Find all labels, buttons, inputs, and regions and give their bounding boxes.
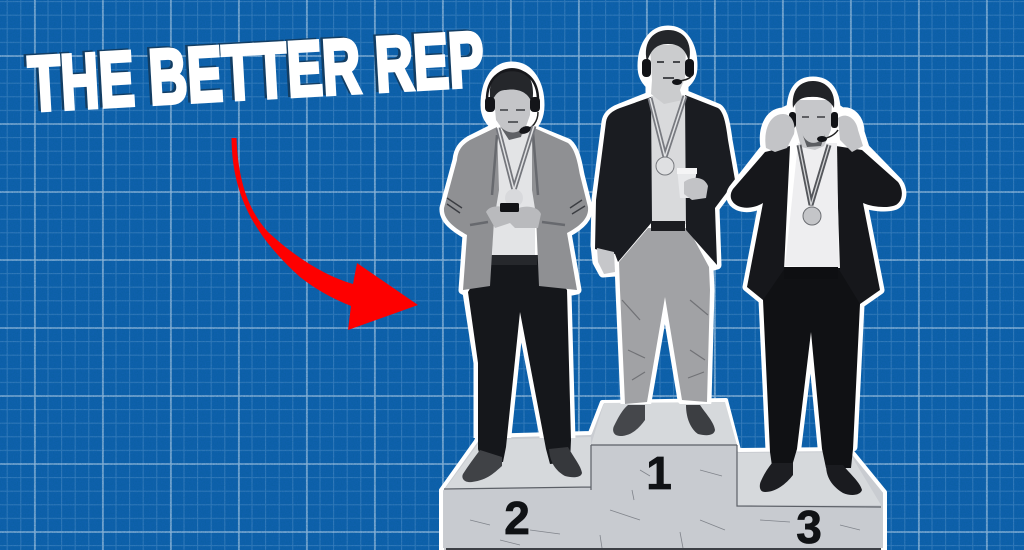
hair [646, 30, 690, 62]
headset [487, 70, 538, 100]
medal and ribbon [650, 96, 685, 157]
hair [793, 81, 834, 108]
title: THE BETTER REP [26, 15, 486, 128]
arrow: red curved pointer [232, 138, 418, 330]
sleeve shading [447, 198, 585, 214]
blazer [731, 146, 902, 304]
trousers [619, 228, 710, 404]
white cut-out outline [731, 81, 902, 450]
hair [490, 68, 533, 103]
podium number 2: 2 [504, 492, 530, 544]
shirt [651, 96, 686, 224]
podium [441, 400, 885, 550]
blazer [595, 95, 735, 265]
right shoe [686, 405, 715, 435]
neck and face [650, 45, 686, 104]
white cut-out outline [595, 30, 735, 404]
headset [789, 112, 796, 128]
belt [651, 221, 685, 231]
neck and face [493, 86, 531, 138]
phone [500, 203, 519, 212]
person: third place, black suit adjusting headset [731, 81, 902, 495]
title: THE BETTER REP [23, 13, 484, 127]
shirt [492, 130, 535, 258]
trousers [468, 255, 571, 464]
left shoe [613, 405, 645, 436]
right shoe [826, 465, 862, 495]
medal and ribbon [498, 126, 534, 190]
white cut-out outline [444, 66, 588, 447]
podium number 1: 1 [646, 447, 672, 499]
belt [784, 267, 838, 279]
left hand [597, 248, 615, 274]
right hand [684, 178, 708, 200]
person: first place, dark blazer with coffee cup [595, 30, 735, 436]
right shoe [549, 447, 582, 477]
person: second place, grey blazer with phone [444, 66, 588, 482]
belt [491, 255, 537, 265]
shirt [785, 143, 839, 268]
left shoe [462, 450, 502, 482]
headset [642, 59, 651, 77]
podium tier 1 top [591, 402, 737, 445]
neck and face [795, 100, 832, 150]
medal and ribbon [799, 145, 829, 205]
title [23, 13, 486, 128]
left hand [765, 114, 795, 152]
podium front faces [444, 445, 881, 550]
podium tier 2 top [445, 437, 591, 489]
right hand [838, 116, 863, 152]
coffee cup [677, 168, 697, 198]
blazer [444, 127, 588, 290]
podium tier 3 top [737, 452, 881, 505]
hands [486, 206, 541, 228]
left shoe [760, 463, 793, 492]
trousers [763, 268, 860, 468]
